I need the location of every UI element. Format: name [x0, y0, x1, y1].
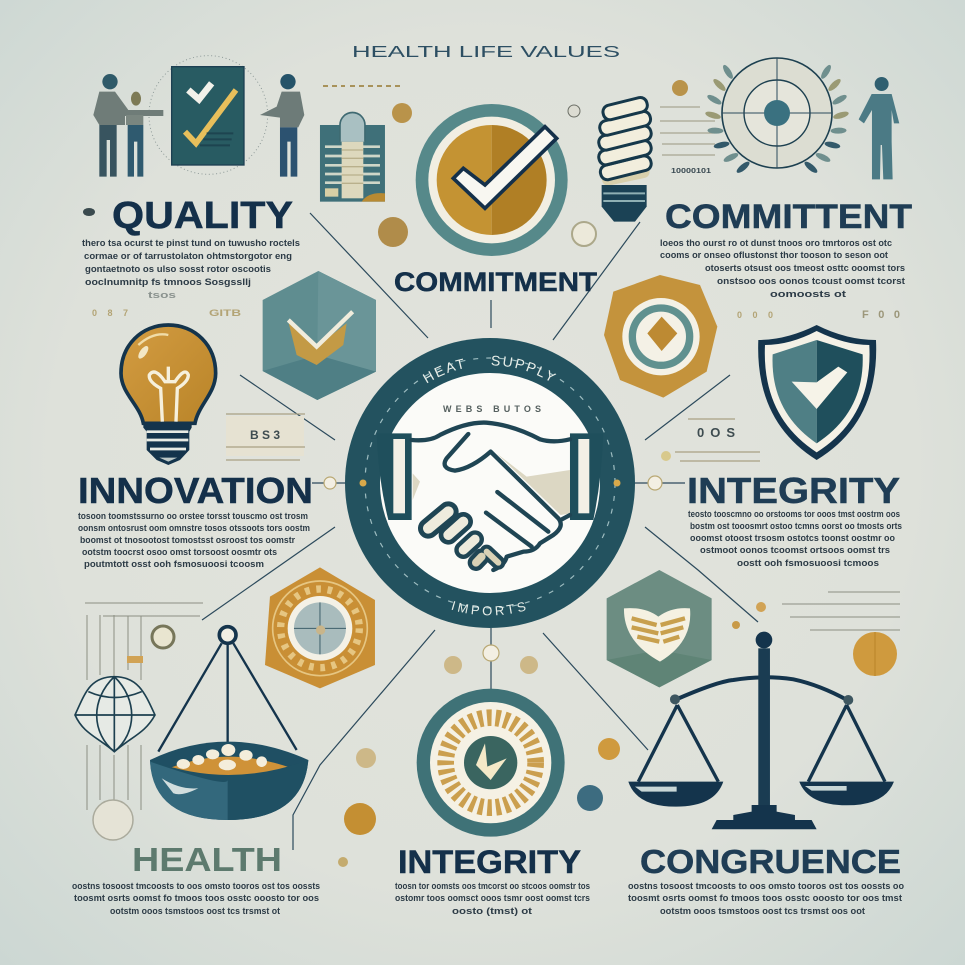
heading: health: HEALTH — [132, 841, 282, 878]
icon: gold medallion — [265, 567, 375, 688]
text block: integrity bottom: ostomr toos oomsct ooos tsmr oost oomst tcrs — [395, 893, 590, 904]
icon: bowl on balance — [150, 627, 308, 820]
heading: innovation: INNOVATION — [78, 470, 313, 511]
icon: data card — [320, 112, 385, 202]
connector lines — [85, 213, 900, 850]
icon: globe — [75, 677, 155, 752]
icon: dotted circle — [149, 56, 268, 174]
beige shading — [413, 453, 570, 515]
text block: health: ootstm ooos tsmstoos oost tcs trsmst ot — [110, 906, 281, 917]
text block: innovation: ootstm toocrst osoo omst torsoost oosmtr ots — [82, 547, 277, 558]
central emblem: handshake — [345, 338, 635, 628]
text block: congruence: ootstm ooos tsmstoos oost tcs trsmst oos oot — [660, 906, 866, 917]
heading: integrity right: INTEGRITY — [687, 470, 900, 511]
icon: gold hexagon — [604, 275, 717, 398]
text block: integrity bottom: oosto (tmst) ot — [452, 906, 533, 917]
text block: congruence — [628, 881, 904, 917]
text block: integrity bottom: toosn tor oomsts oos tmcorst oo stcoos oomstr tos — [395, 881, 590, 892]
icon: bottom badge — [417, 689, 565, 837]
decorative gold circles — [93, 602, 897, 867]
fingers — [428, 512, 498, 563]
icon: scales of justice — [628, 632, 894, 829]
small labels: GITB — [209, 308, 242, 318]
text block: commitment: otoserts otsust oos tmeost osttc ooomst tors — [705, 263, 905, 274]
icon: spiral bulb — [597, 96, 653, 222]
text block: quality: gontaetnoto os ulso sosst rotor oscootis — [85, 264, 271, 275]
cuffs — [377, 433, 603, 520]
text block: quality: cormae or of tarrustolaton ohtmstorgotor eng — [84, 251, 292, 262]
heading: quality: QUALITY — [112, 195, 293, 237]
text block: congruence: oostns tosoost tmcoosts to oos omsto tooros ost tos oossts oo — [628, 881, 904, 892]
small labels: 0OS — [697, 425, 735, 440]
heading: commitment right: COMMITTENT — [665, 198, 912, 236]
small gold dots top — [323, 80, 688, 247]
text block: commitment: cooms or onseo oflustonst thor tooson to seson oot — [660, 250, 889, 261]
hands outline — [412, 423, 570, 570]
text block: innovation: poutmtott osst ooh fsmosuoosi tcoosm — [84, 559, 264, 570]
text block: integrity: bostm ost tooosmrt ostoo tcmns oorst oo tmosts orts — [690, 521, 902, 532]
icon: heart hexagon — [607, 570, 712, 687]
text block: integrity: ostmoot oonos tcoomst ortsoos oomst trs — [700, 545, 890, 556]
icon: clipboard — [172, 67, 244, 165]
title: HEALTH LIFE VALUES — [352, 44, 620, 61]
small labels: F00 — [862, 309, 900, 321]
ring text: bottom: IMPORTS — [452, 601, 526, 616]
text block: integrity — [688, 509, 902, 569]
text block: quality: thero tsa ocurst te pinst tund on tuwusho roctels — [82, 238, 300, 249]
text block: innovation — [78, 511, 310, 570]
small labels: 0 8 7 — [92, 308, 128, 318]
icon: teal hexagon check — [263, 271, 376, 400]
text block: integrity: oostt ooh fsmosuoosi tcmoos — [737, 558, 879, 569]
text block: commitment — [660, 238, 906, 300]
icon: quality check badge — [416, 104, 568, 256]
small labels: 0 0 0 — [737, 310, 773, 320]
text block: quality: tsos — [148, 290, 176, 301]
text block: quality: ooclnumnitp fs tmnoos Sosgssllj — [85, 277, 251, 288]
heading: integrity bottom: INTEGRITY — [398, 844, 581, 880]
text block: health: oostns tosoost tmcoosts to oos omsto tooros ost tos oossts — [72, 881, 320, 892]
text block: innovation: tosoon toomstssurno oo orstee torsst touscmo ost trosm — [78, 511, 308, 522]
heading: commitment center: COMMITMENT — [394, 267, 598, 297]
icon: left person — [93, 74, 163, 177]
text block: health — [72, 881, 320, 917]
icon: person right — [859, 77, 899, 179]
text block: integrity: ooomst otoost trsosm ostotcs toonst oostmr oo — [690, 533, 895, 544]
icon: left light bulb — [121, 325, 216, 465]
laurel leaves — [705, 63, 849, 175]
icon: target with laurel — [705, 58, 849, 175]
icon: shield — [758, 325, 876, 460]
small inner text: WEBS BUTOS — [443, 404, 541, 414]
small labels: BS3 — [250, 428, 280, 442]
text block: integrity: teosto tooscmno oo orstooms tor ooos tmst oostrm oos — [688, 509, 900, 520]
icon: people with clipboard — [93, 56, 385, 202]
text block: commitment: loeos tho ourst ro ot dunst tnoos oro tmrtoros ost otc — [660, 238, 892, 249]
text block: quality — [82, 238, 300, 301]
icon: right person — [260, 74, 304, 177]
small dashes under target: 10000101 — [671, 168, 711, 175]
text block: innovation: boomst ot tnosootost tomostsst osroost tos oomstr — [80, 535, 295, 546]
text block: commitment: onstsoo oos oonos tcoust oomst tcorst — [717, 276, 906, 287]
text block: innovation: oonsm ontosrust oom omnstre tosos otssoots tors oostm — [78, 523, 310, 534]
decorative lines near bulb — [660, 107, 715, 155]
text block: integrity bottom — [395, 881, 590, 917]
small labels — [92, 308, 900, 461]
text block: congruence: toosmt osrts oomst fo tmoos toos osstc ooosto tor oos tmst — [628, 893, 903, 904]
heading: congruence: CONGRUENCE — [640, 843, 901, 880]
text block: commitment: oomoosts ot — [770, 289, 847, 300]
text block: health: toosmt osrts oomst fo tmoos toos osstc ooosto tor oos — [74, 893, 319, 904]
ring text: top: HEAT SUPPLY — [422, 356, 556, 384]
